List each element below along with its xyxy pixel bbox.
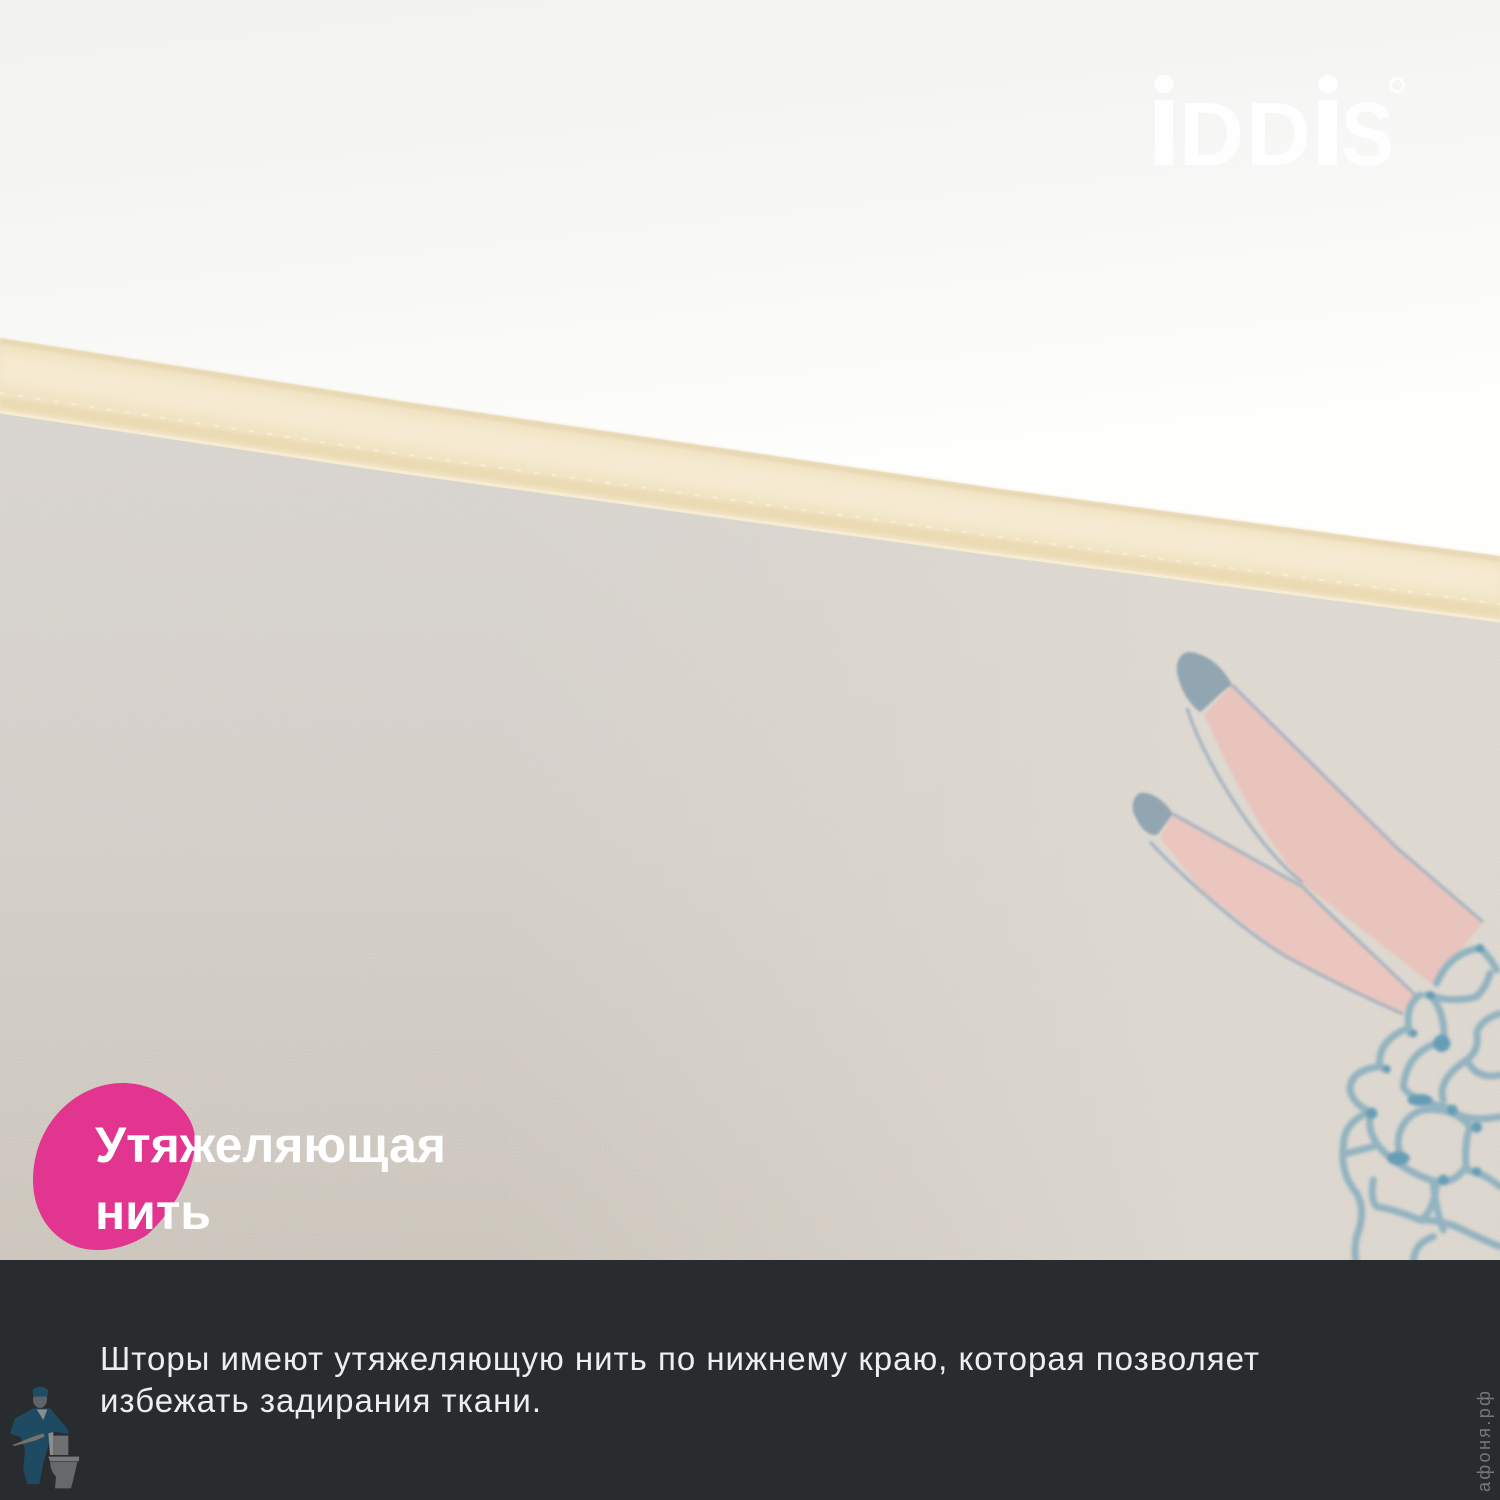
heading: нить (95, 1184, 211, 1240)
logo: IDDIS (1154, 74, 1404, 185)
fabric curtain panel (0, 410, 1500, 1262)
dark footer band (0, 1260, 1500, 1500)
description text: Шторы имеют утяжеляющую нить по нижнему краю, которая позволяет (100, 1340, 1259, 1377)
illustration: two fingers printed on the curtain (1133, 652, 1483, 1014)
description text: избежать задирания ткани. (100, 1382, 541, 1419)
heading: Утяжеляющая (95, 1117, 446, 1173)
icon: plumber with toilet watermark (10, 1387, 79, 1488)
vertical watermark: website: афоня.рф (1474, 1391, 1494, 1492)
heading (95, 1117, 446, 1240)
white background surface (0, 0, 1500, 640)
pink blob accent (33, 1083, 195, 1250)
satin trim along curtain edge (0, 338, 1500, 622)
logo: IDDIS: S (1341, 83, 1394, 184)
logo: IDDIS: D (1246, 85, 1311, 185)
illustration: lace cuff printed on the curtain (1343, 944, 1500, 1263)
logo: IDDIS: D (1179, 85, 1244, 185)
description text (100, 1340, 1259, 1419)
